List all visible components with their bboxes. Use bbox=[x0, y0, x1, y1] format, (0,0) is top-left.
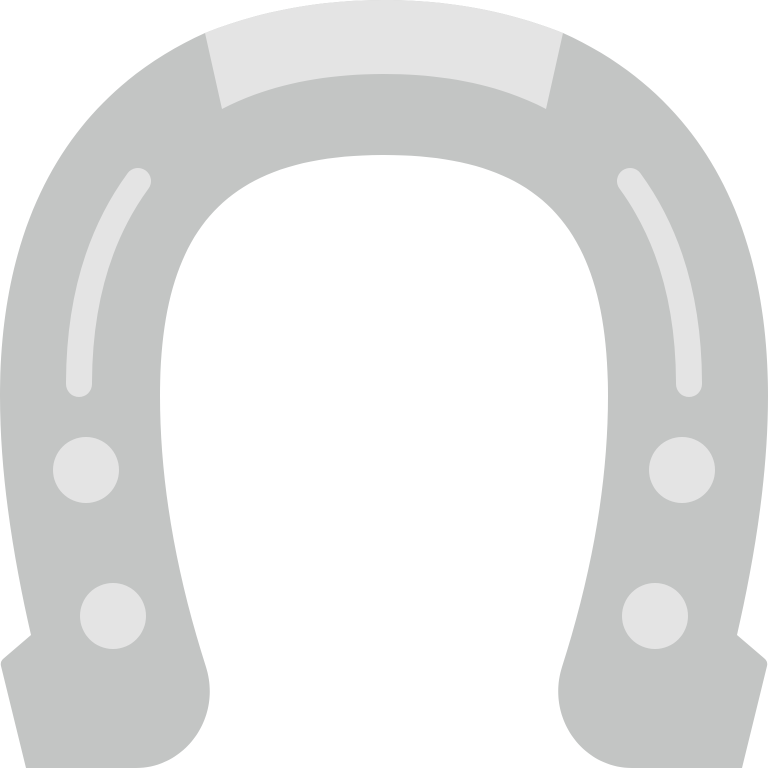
right groove bbox=[630, 181, 689, 384]
left lower nail hole bbox=[80, 583, 146, 649]
left upper nail hole bbox=[53, 437, 119, 503]
top highlight band bbox=[205, 0, 563, 109]
right upper nail hole bbox=[649, 437, 715, 503]
left groove bbox=[79, 181, 138, 384]
right lower nail hole bbox=[622, 583, 688, 649]
